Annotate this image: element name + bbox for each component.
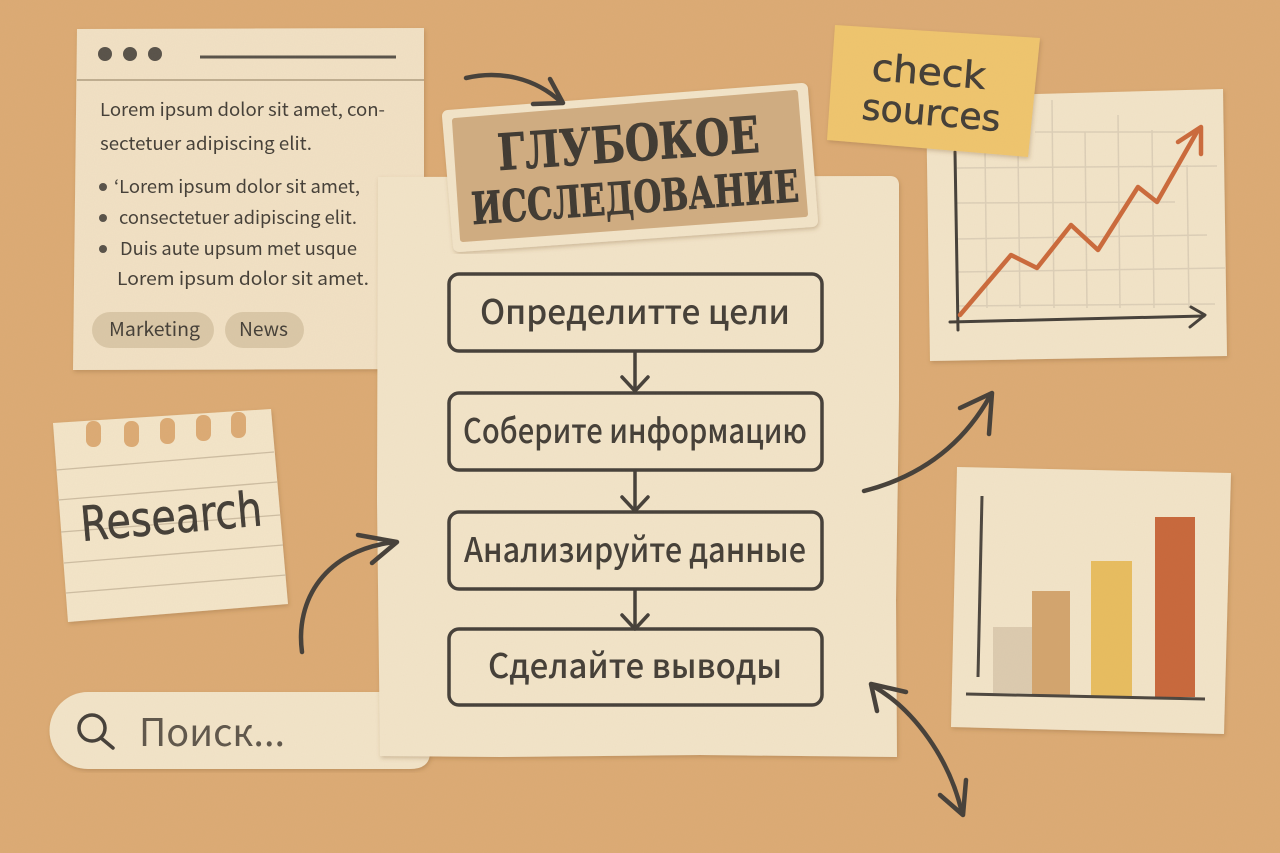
step 2 [449,393,822,470]
step 1 [449,274,822,351]
browser body text: ʻLorem ipsum dolor sit amet, [114,173,360,199]
arrow: research to paper [301,535,397,652]
browser body text: Lorem ipsum dolor sit amet. [117,265,369,291]
icon: magnifier [79,715,113,748]
sticky text [860,46,1002,140]
title label [448,89,812,246]
line chart card [926,89,1227,361]
browser dots [98,47,162,61]
arrow [622,590,648,629]
browser body text: Lorem ipsum dolor sit amet, con- [100,96,385,122]
arrow [622,352,648,391]
panel: research note [53,409,288,622]
arrow [622,471,648,511]
step 3: Анализируйте данные [464,523,806,572]
sticky text: check [870,46,988,98]
arrow: double-headed [871,684,966,815]
search bar: Поиск... [139,702,285,757]
step 3 [449,512,822,589]
sticky text: sources [860,87,1002,140]
step 2: Соберите информацию [463,404,807,453]
title label: ИССЛЕДОВАНИЕ [470,161,801,235]
sticky note [827,25,1040,157]
title: ГЛУБОКОЕ [496,105,761,182]
axes [950,152,1205,330]
tags: News [239,315,288,342]
panel: central paper [377,176,899,757]
arrow: to title [466,75,563,104]
panel: browser window [73,28,424,370]
step 4 [449,629,822,705]
browser body text [99,96,385,291]
tags: Marketing [109,315,200,342]
browser body text: consectetuer adipiscing elit. [119,204,357,230]
tags [92,312,304,348]
browser body text: Duis aute upsum met usque [120,235,357,261]
trend line [960,127,1201,315]
search bar [50,692,430,769]
bar chart card [951,467,1231,734]
browser body text: sectetuer adipiscing elit. [100,130,312,156]
arrow: paper to line chart [864,393,992,491]
step 4: Сделайте выводы [488,639,782,688]
step 1: Определитте цели [480,285,790,334]
handwritten label: Research [78,481,264,553]
